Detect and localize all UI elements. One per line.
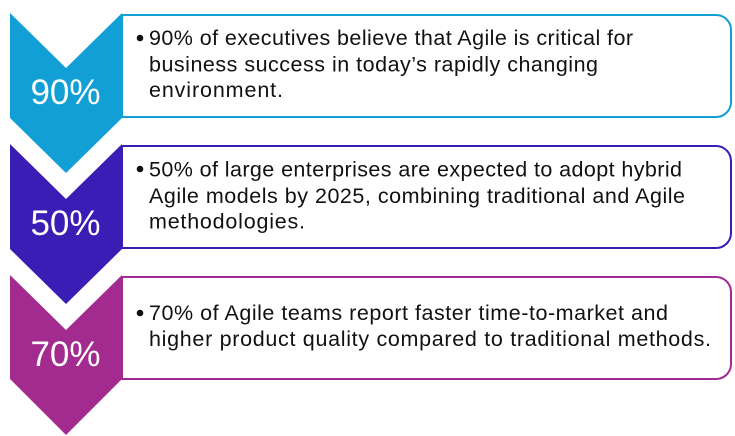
panel: 90% statistic [10, 13, 731, 173]
text: 70% description: higher product quality compared to traditional methods. [149, 327, 711, 351]
text: 90% description [149, 26, 633, 102]
text: 50% description: 50% of large enterprises are expected to adopt hybrid [149, 158, 682, 182]
text: 70% description [149, 301, 711, 351]
text: 90% description: 90% of executives believe that Agile is critical for [149, 26, 633, 50]
text box: 70% [122, 277, 731, 379]
text box: 50% [122, 146, 731, 248]
value: 50%: 50% [30, 204, 101, 243]
chevron: 50% [10, 144, 122, 304]
panel: 50% statistic [10, 144, 731, 304]
text: 70% description: 70% of Agile teams report faster time-to-market and [149, 301, 668, 325]
text: 50% description: methodologies. [149, 210, 305, 234]
text: 90% description: environment. [149, 78, 283, 102]
bullet [137, 35, 143, 41]
value: 90%: 90% [30, 73, 101, 112]
value: 70%: 70% [30, 335, 101, 374]
text: 50% description [149, 158, 685, 234]
bullet [137, 310, 143, 316]
text: 50% description: Agile models by 2025, combining traditional and Agile [149, 184, 685, 208]
panel: 70% statistic [10, 275, 731, 435]
bullet [137, 166, 143, 172]
chevron: 90% [10, 13, 122, 173]
text: 90% description: business success in today’s rapidly changing [149, 52, 598, 76]
chevron: 70% [10, 275, 122, 435]
text box: 90% [122, 15, 731, 117]
